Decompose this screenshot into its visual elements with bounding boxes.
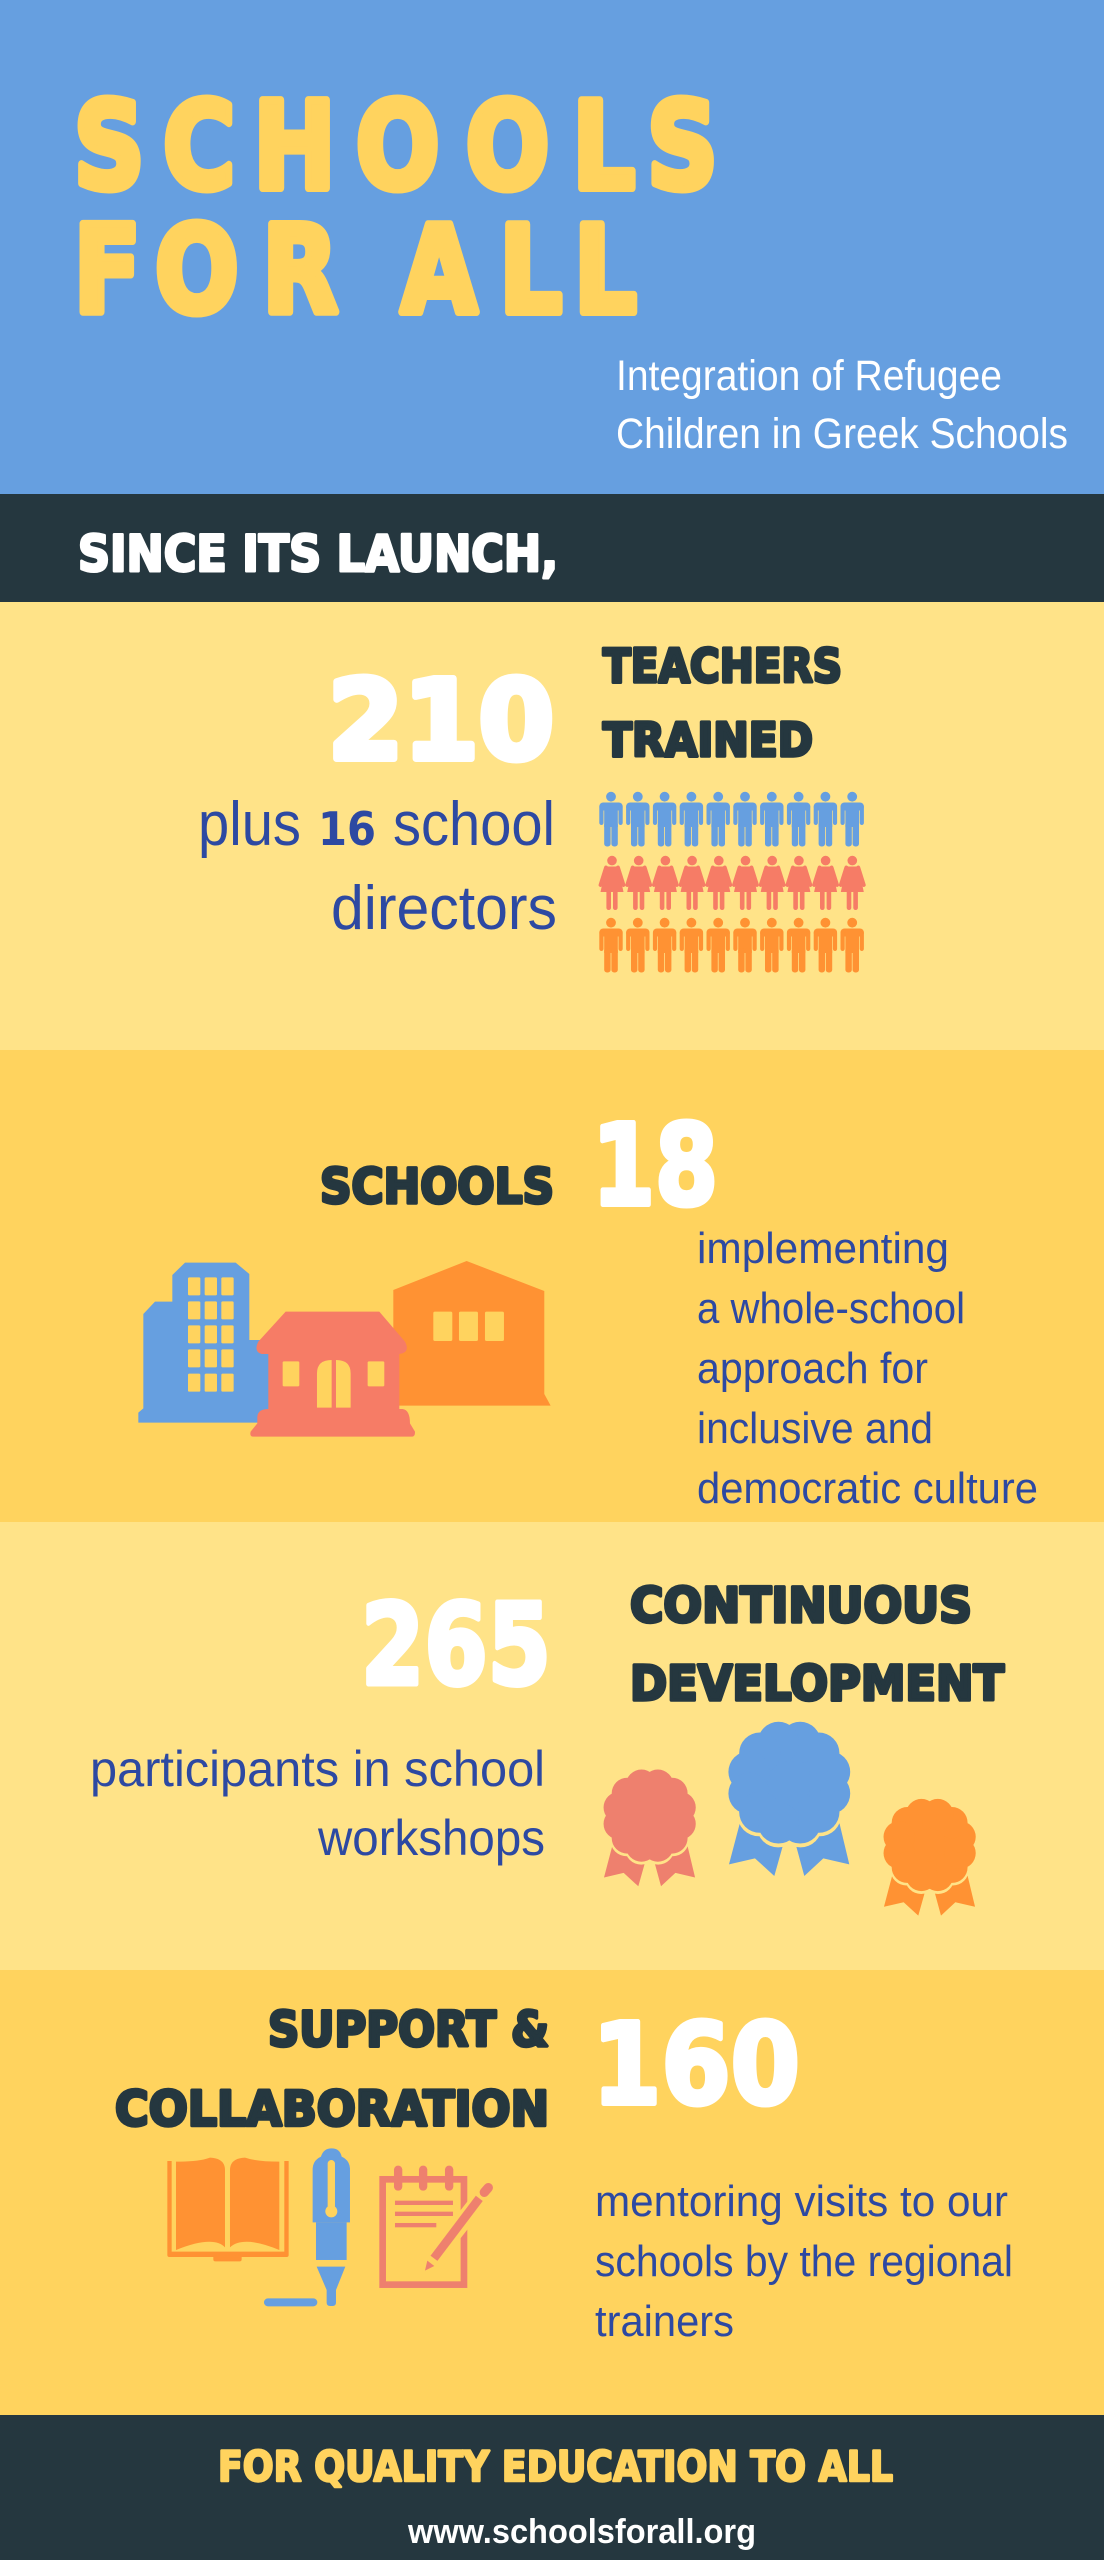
title: SCHOOLS xyxy=(74,76,718,216)
icons: row of blue men xyxy=(599,792,864,846)
text: participants in school workshops xyxy=(90,1741,545,1866)
heading: teachers trained xyxy=(603,639,842,767)
subtitle: Children in Greek Schools xyxy=(616,410,1068,458)
icons: book, pen and notepad xyxy=(167,2148,490,2306)
subtitle: Integration of Refugee xyxy=(616,352,1002,400)
heading: support and collaboration: SUPPORT & xyxy=(268,2002,549,2058)
heading: continuous development: DEVELOPMENT xyxy=(630,1656,1004,1712)
icons: row of red women xyxy=(600,856,864,910)
icon: fountain pen xyxy=(264,2148,350,2306)
number: 210: 210 xyxy=(328,656,554,784)
text: whole-school approach: approach for xyxy=(697,1344,928,1393)
text: whole-school approach: democratic culture xyxy=(697,1464,1038,1513)
text: mentoring visits xyxy=(595,2177,1013,2346)
text: mentoring visits: schools by the regional xyxy=(595,2237,1013,2286)
panel: since its launch banner xyxy=(0,494,1104,602)
icon: notepad and pencil xyxy=(383,2166,490,2285)
text: whole-school approach xyxy=(697,1224,1038,1513)
subtitle xyxy=(616,352,1068,458)
icons: row of orange men xyxy=(599,918,864,972)
text: participants in school workshops: participants in school xyxy=(90,1741,545,1797)
number: 18: 18 xyxy=(592,1102,718,1232)
icon: orange medal xyxy=(882,1799,977,1916)
panel: teachers trained xyxy=(0,602,1104,1050)
title: FOR ALL xyxy=(74,200,637,340)
panel: schools xyxy=(0,1050,1104,1522)
panel: continuous development xyxy=(0,1522,1104,1970)
heading: support and collaboration: COLLABORATION xyxy=(115,2082,549,2138)
heading: teachers trained: TRAINED xyxy=(603,713,813,767)
icon: red medal xyxy=(602,1769,697,1886)
text: plus 16 school directors xyxy=(198,790,557,943)
icon: orange school xyxy=(393,1261,551,1406)
text: participants in school workshops: workshops xyxy=(317,1810,545,1866)
text: plus 16 school directors: school xyxy=(393,790,555,859)
icon: red house xyxy=(250,1312,415,1437)
icons: three award medals xyxy=(602,1721,977,1916)
heading: schools: SCHOOLS xyxy=(320,1159,554,1215)
text: plus 16 school directors: plus xyxy=(198,790,301,859)
icons: three school buildings xyxy=(138,1261,551,1437)
footer website: www.schoolsforall.org xyxy=(407,2513,756,2551)
text: plus 16 school directors: 16 xyxy=(318,802,376,856)
number: 265: 265 xyxy=(361,1581,551,1711)
title xyxy=(74,76,718,340)
panel: header xyxy=(0,0,1104,494)
icon: blue tower xyxy=(138,1263,270,1423)
text: plus 16 school directors: directors xyxy=(331,874,557,943)
text: whole-school approach: implementing xyxy=(697,1224,949,1273)
heading: support and collaboration xyxy=(115,2002,549,2138)
icon: blue medal xyxy=(726,1721,852,1876)
text: mentoring visits: mentoring visits to our xyxy=(595,2177,1008,2226)
icon: open book xyxy=(167,2158,289,2261)
text: whole-school approach: inclusive and xyxy=(697,1404,933,1453)
text: mentoring visits: trainers xyxy=(595,2297,734,2346)
panel: footer xyxy=(0,2415,1104,2560)
text: whole-school approach: a whole-school xyxy=(697,1284,965,1333)
heading: continuous development: CONTINUOUS xyxy=(630,1578,972,1634)
footer tagline: FOR QUALITY EDUCATION TO ALL xyxy=(218,2442,893,2491)
number: 160: 160 xyxy=(592,2000,800,2130)
heading: continuous development xyxy=(630,1578,1004,1712)
banner heading: SINCE ITS LAUNCH, xyxy=(78,525,558,583)
panel: support and collaboration xyxy=(0,1970,1104,2415)
heading: teachers trained: TEACHERS xyxy=(603,639,842,693)
